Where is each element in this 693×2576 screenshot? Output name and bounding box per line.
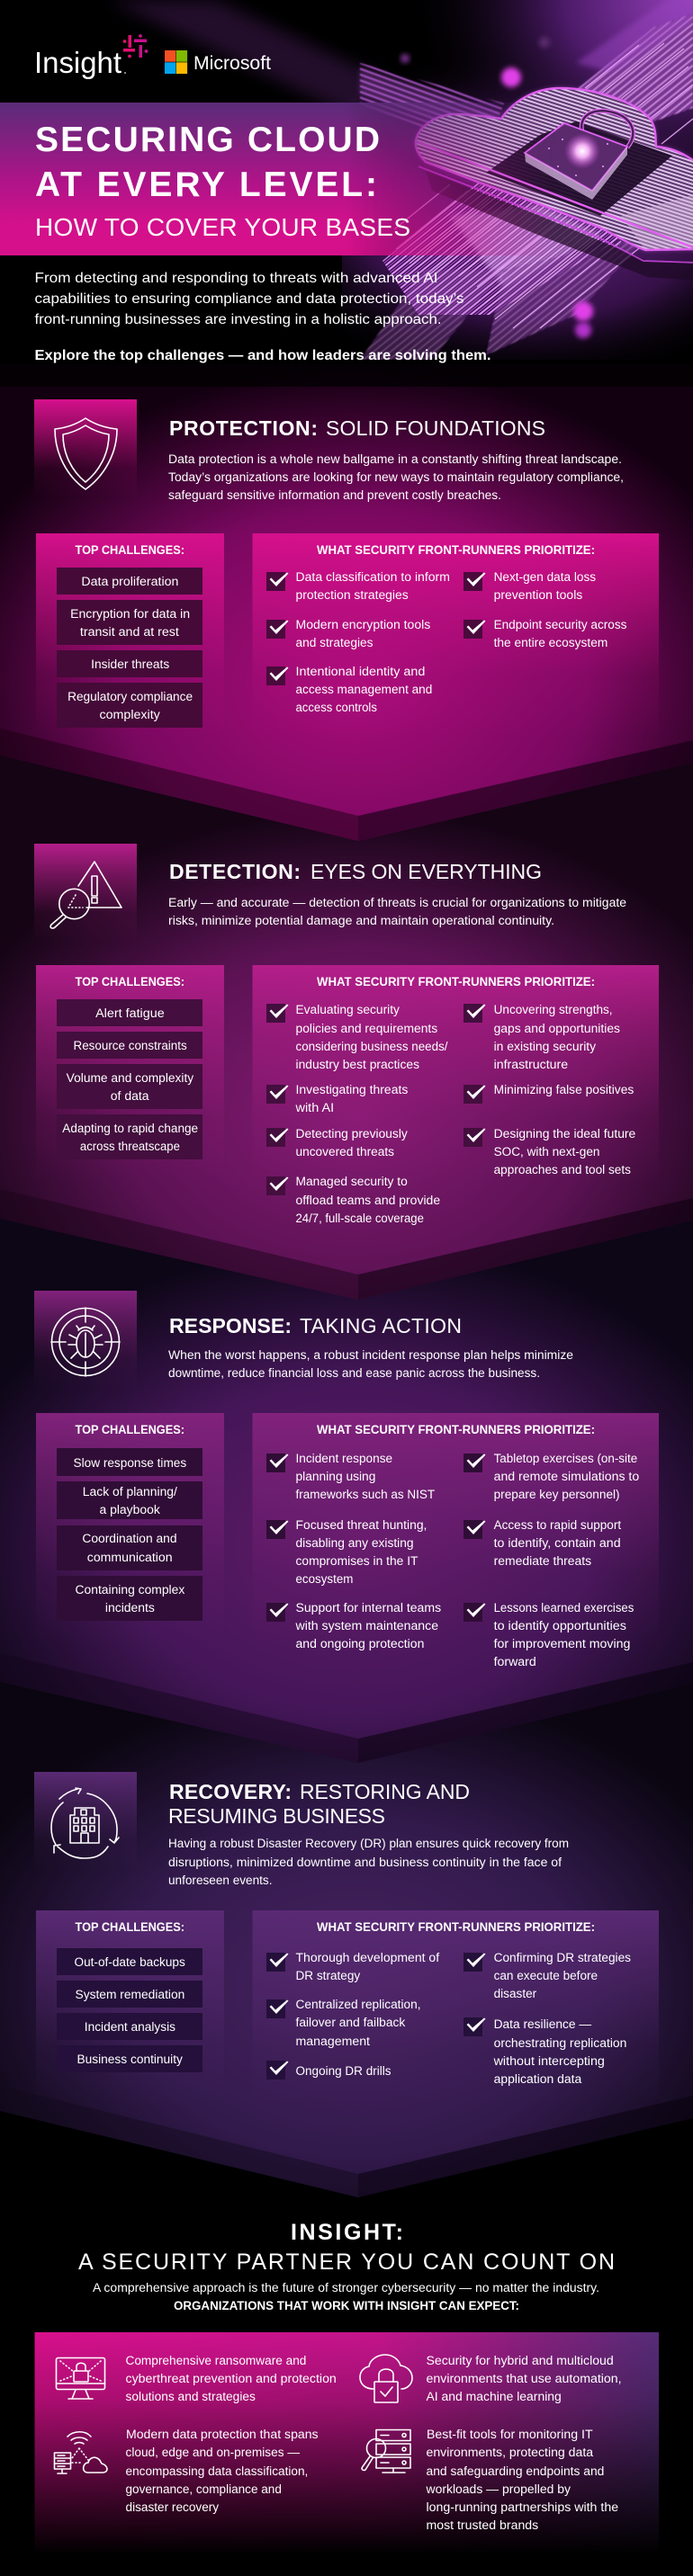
panel: top challenges: Data proliferation [81, 575, 178, 588]
heading: recovery: RESTORING AND [300, 1780, 470, 1803]
text: best-fit tools: most trusted brands [427, 2518, 538, 2532]
closing intro text: A comprehensive approach is the future of stronger cybersecurity — no matter the industry. [93, 2281, 599, 2294]
panel: top challenges: TOP CHALLENGES: [76, 1423, 184, 1436]
panel: priorities: and strategies [295, 636, 374, 649]
panel: priorities: Designing the ideal future [494, 1127, 635, 1140]
intro call to action: Explore the top challenges — and how leaders are solving them. [34, 348, 491, 363]
text: best-fit tools: Best-fit tools for monitoring IT [427, 2428, 593, 2441]
panel: what Insight customers can expect [34, 2332, 659, 2554]
panel: top challenges: Resource constraints [74, 1039, 187, 1052]
intro paragraph: front-running businesses are investing in a holistic approach. [34, 312, 441, 327]
panel: priorities: access controls [295, 701, 377, 714]
panel: priorities: compromises in the IT [295, 1554, 418, 1568]
panel: top challenges: incidents [105, 1601, 155, 1614]
text: modern data protection: Modern data protection that spans [126, 2428, 319, 2441]
panel: priorities: and remote simulations to [494, 1470, 639, 1483]
panel: top challenges: Incident analysis [85, 2020, 176, 2034]
title band [0, 103, 542, 255]
panel: recovery [34, 1772, 659, 2104]
description: protection: safeguard sensitive information and prevent costly breaches. [168, 488, 501, 502]
panel: top challenges: complexity [99, 708, 160, 721]
text: hybrid and multicloud [427, 2354, 622, 2403]
description: protection [168, 452, 624, 502]
panel: priorities: uncovered threats [295, 1145, 394, 1158]
panel: priorities: Focused threat hunting, [295, 1518, 427, 1532]
panel: detection [34, 844, 659, 1225]
icon: monitor with lock [56, 2358, 104, 2399]
panel: priorities: can execute before [494, 1969, 598, 1982]
panel: response [34, 1291, 659, 1668]
panel: top challenges: System remediation [76, 1988, 184, 2001]
panel: priorities: without intercepting [493, 2054, 605, 2068]
panel: priorities: Data resilience — [494, 2017, 592, 2031]
panel: priorities: SOC, with next-gen [494, 1145, 599, 1158]
cloud body [416, 88, 693, 263]
logo: Microsoft [165, 50, 271, 74]
panel: priorities: Lessons learned exercises [494, 1601, 634, 1614]
padlock [400, 37, 633, 338]
panel: priorities: prevention tools [494, 588, 583, 602]
description: recovery [168, 1837, 569, 1887]
panel: priorities: the entire ecosystem [494, 636, 608, 649]
panel: priorities: Uncovering strengths, [494, 1003, 613, 1016]
description: response [168, 1348, 573, 1380]
text: best-fit tools: workloads — propelled by [425, 2482, 571, 2496]
heading: protection: SOLID FOUNDATIONS [326, 416, 545, 440]
panel: priorities: ecosystem [295, 1572, 353, 1586]
panel: priorities: Data classification to inform [295, 570, 450, 584]
panel: top challenges: transit and at rest [80, 625, 179, 639]
panel: priorities: approaches and tool sets [494, 1163, 631, 1176]
text: modern data protection: encompassing data classification, [126, 2464, 308, 2478]
panel: top challenges [36, 965, 224, 1181]
text: ransomware prevention: solutions and strategies [126, 2390, 256, 2403]
panel: top challenges: Out-of-date backups [74, 1955, 185, 1969]
logo: Insight [34, 34, 148, 79]
panel: priorities: WHAT SECURITY FRONT-RUNNERS PRIORITIZE: [317, 543, 595, 557]
text: modern data protection [126, 2428, 319, 2514]
closing heading: A SECURITY PARTNER YOU CAN COUNT ON [78, 2250, 615, 2275]
panel: top challenges: communication [87, 1551, 173, 1564]
logo: Microsoft: Microsoft [194, 53, 271, 74]
heading: response: TAKING ACTION [300, 1314, 462, 1337]
panel: top challenges: Adapting to rapid change [62, 1122, 198, 1135]
panel: priorities: prepare key personnel) [494, 1488, 620, 1501]
panel: priorities: management [295, 2035, 370, 2048]
panel: priorities: Intentional identity and [295, 665, 425, 678]
text: modern data protection: cloud, edge and on-premises — [126, 2446, 300, 2459]
icon: shield [34, 399, 137, 498]
panel: priorities: Modern encryption tools [295, 618, 431, 631]
icon: cloud with lock [360, 2355, 412, 2402]
panel: priorities [252, 1413, 659, 1668]
section background: recovery [0, 1619, 693, 2197]
panel: priorities: Endpoint security across [494, 618, 627, 631]
panel: priorities: WHAT SECURITY FRONT-RUNNERS PRIORITIZE: [317, 1920, 595, 1934]
panel: priorities: protection strategies [295, 588, 409, 602]
description: response: When the worst happens, a robust incident response plan helps minimize [168, 1348, 573, 1362]
panel: priorities: Support for internal teams [295, 1601, 441, 1614]
panel: priorities [252, 965, 659, 1225]
description: recovery: disruptions, minimized downtime and business continuity in the face of [168, 1856, 562, 1869]
icon: warning triangle with magnifier [34, 844, 137, 943]
heading: detection: EYES ON EVERYTHING [310, 860, 542, 883]
title: SECURING CLOUD [35, 121, 380, 159]
title [35, 121, 410, 241]
text: hybrid and multicloud: Security for hybrid and multicloud [427, 2354, 614, 2367]
panel: priorities: considering business needs/ [295, 1040, 448, 1053]
heading: recovery: RECOVERY: [169, 1780, 292, 1803]
panel: priorities: Centralized replication, [295, 1998, 421, 2011]
heading: recovery: RESUMING BUSINESS [168, 1804, 385, 1828]
intro paragraph: capabilities to ensuring compliance and data protection, today’s [34, 291, 464, 307]
panel: priorities: Confirming DR strategies [494, 1951, 631, 1964]
closing heading: INSIGHT: [291, 2220, 403, 2245]
text: modern data protection: disaster recovery [126, 2500, 219, 2514]
panel: top challenges [36, 533, 224, 736]
text: hybrid and multicloud: environments that use automation, [427, 2372, 622, 2385]
panel: priorities: failover and failback [295, 2016, 406, 2029]
panel: priorities: WHAT SECURITY FRONT-RUNNERS PRIORITIZE: [317, 975, 595, 988]
panel: top challenges: TOP CHALLENGES: [76, 1920, 184, 1934]
panel: priorities: offload teams and provide [295, 1194, 440, 1207]
panel: top challenges: Encryption for data in [70, 607, 190, 621]
title: HOW TO COVER YOUR BASES [35, 213, 410, 241]
icon: building with recovery arrows [34, 1772, 137, 1871]
title: AT EVERY LEVEL: [35, 165, 377, 204]
panel: priorities: gaps and opportunities [494, 1022, 620, 1035]
panel: priorities: Incident response [295, 1452, 392, 1465]
panel: priorities: Next-gen data loss [494, 570, 596, 584]
description: detection: risks, minimize potential damage and maintain operational continuity. [168, 914, 554, 927]
panel: top challenges: Slow response times [74, 1456, 186, 1470]
closing intro text [93, 2281, 599, 2312]
panel: priorities: access management and [295, 683, 432, 696]
text: best-fit tools: long-running partnerships with the [427, 2500, 618, 2514]
panel: priorities: with system maintenance [294, 1619, 438, 1632]
panel: priorities: disabling any existing [295, 1536, 414, 1550]
text: best-fit tools: and safeguarding endpoints and [427, 2464, 604, 2478]
panel: top challenges: Lack of planning/ [83, 1485, 177, 1498]
panel: priorities [252, 1910, 659, 2104]
panel: top challenges: TOP CHALLENGES: [76, 543, 184, 557]
panel: priorities: DR strategy [295, 1969, 360, 1982]
panel: priorities: Tabletop exercises (on-site [494, 1452, 637, 1465]
panel: top challenges: TOP CHALLENGES: [76, 975, 184, 988]
description: response: downtime, reduce financial loss and ease panic across the business. [168, 1366, 540, 1380]
panel: top challenges: across threatscape [80, 1140, 180, 1153]
heading: recovery [168, 1780, 470, 1828]
panel: top challenges: Volume and complexity [67, 1071, 194, 1085]
panel: priorities: with AI [294, 1101, 334, 1114]
description: detection: Early — and accurate — detection of threats is crucial for organizations to mitigate [168, 896, 626, 909]
panel: priorities: policies and requirements [295, 1022, 437, 1035]
panel: top challenges: Regulatory compliance [68, 690, 193, 703]
panel: priorities: Managed security to [295, 1175, 408, 1188]
panel: priorities: Investigating threats [295, 1083, 409, 1096]
hero image: cloud and padlock circuit board [108, 0, 693, 360]
intro paragraph: From detecting and responding to threats with advanced AI [34, 271, 437, 286]
icon: server stack with magnifier [362, 2430, 410, 2473]
panel: priorities: remediate threats [494, 1554, 591, 1568]
text: best-fit tools [425, 2428, 618, 2532]
panel: top challenges [36, 1413, 224, 1642]
heading: response [169, 1314, 462, 1337]
icon: bug in target [34, 1291, 137, 1390]
text: best-fit tools: environments, protecting data [427, 2446, 594, 2459]
panel: top challenges: Alert fatigue [95, 1006, 165, 1020]
panel: priorities: to identify, contain and [494, 1536, 621, 1550]
panel: priorities: industry best practices [295, 1058, 419, 1071]
description: protection: Data protection is a whole new ballgame in a constantly shifting threat landscape. [168, 452, 622, 466]
section background: protection [0, 364, 693, 841]
text: ransomware prevention: Comprehensive ransomware and [126, 2354, 306, 2367]
heading: protection [169, 416, 545, 440]
logo: Insight: Insight [34, 46, 122, 79]
panel: priorities: frameworks such as NIST [295, 1488, 435, 1501]
description: recovery: Having a robust Disaster Recovery (DR) plan ensures quick recovery from [168, 1837, 569, 1850]
panel: priorities: forward [494, 1655, 536, 1668]
panel: top challenges: Coordination and [82, 1532, 176, 1545]
heading: detection [169, 860, 542, 883]
heading: protection: PROTECTION: [169, 416, 318, 440]
panel: priorities [252, 533, 659, 736]
section background: response [0, 1169, 693, 1763]
panel: priorities: in existing security [494, 1040, 596, 1053]
intro paragraph [34, 271, 464, 327]
panel: top challenges: Containing complex [76, 1583, 185, 1597]
closing intro text: ORGANIZATIONS THAT WORK WITH INSIGHT CAN EXPECT: [174, 2299, 519, 2312]
description: protection: Today’s organizations are looking for new ways to maintain regulatory compliance, [168, 470, 624, 484]
text: ransomware prevention: cyberthreat prevention and protection [126, 2372, 337, 2385]
panel: priorities: Thorough development of [295, 1951, 439, 1964]
panel: top challenges: a playbook [99, 1503, 160, 1516]
panel: priorities: Ongoing DR drills [295, 2064, 392, 2078]
description: recovery: unforeseen events. [168, 1874, 272, 1887]
panel: priorities: Minimizing false positives [494, 1083, 634, 1096]
panel: top challenges: Insider threats [91, 657, 169, 671]
panel: priorities: disaster [494, 1987, 537, 2000]
section background: detection [0, 720, 693, 1300]
closing heading [78, 2220, 615, 2275]
panel: priorities: Evaluating security [295, 1003, 400, 1016]
panel: priorities: 24/7, full-scale coverage [295, 1212, 424, 1225]
panel: priorities: Detecting previously [295, 1127, 408, 1140]
panel: priorities: application data [494, 2072, 582, 2086]
panel: priorities: to identify opportunities [494, 1619, 626, 1632]
heading: response: RESPONSE: [169, 1314, 292, 1337]
icon: wifi, server and cloud [54, 2432, 107, 2473]
heading: detection: DETECTION: [169, 860, 301, 883]
text: hybrid and multicloud: AI and machine learning [427, 2390, 562, 2403]
panel: priorities: planning using [295, 1470, 375, 1483]
panel: priorities: orchestrating replication [494, 2036, 626, 2050]
panel: priorities: for improvement moving [494, 1637, 630, 1650]
text: modern data protection: governance, compliance and [126, 2482, 282, 2496]
panel: priorities: WHAT SECURITY FRONT-RUNNERS PRIORITIZE: [317, 1423, 595, 1436]
panel: top challenges: of data [111, 1089, 149, 1103]
text: ransomware prevention [126, 2354, 337, 2403]
panel: priorities: and ongoing protection [295, 1637, 424, 1650]
description: detection [168, 896, 626, 927]
panel: priorities: infrastructure [494, 1058, 568, 1071]
panel: top challenges: Business continuity [77, 2053, 183, 2066]
panel: top challenges [36, 1910, 224, 2104]
panel: priorities: Access to rapid support [494, 1518, 621, 1532]
panel: protection [34, 399, 659, 736]
